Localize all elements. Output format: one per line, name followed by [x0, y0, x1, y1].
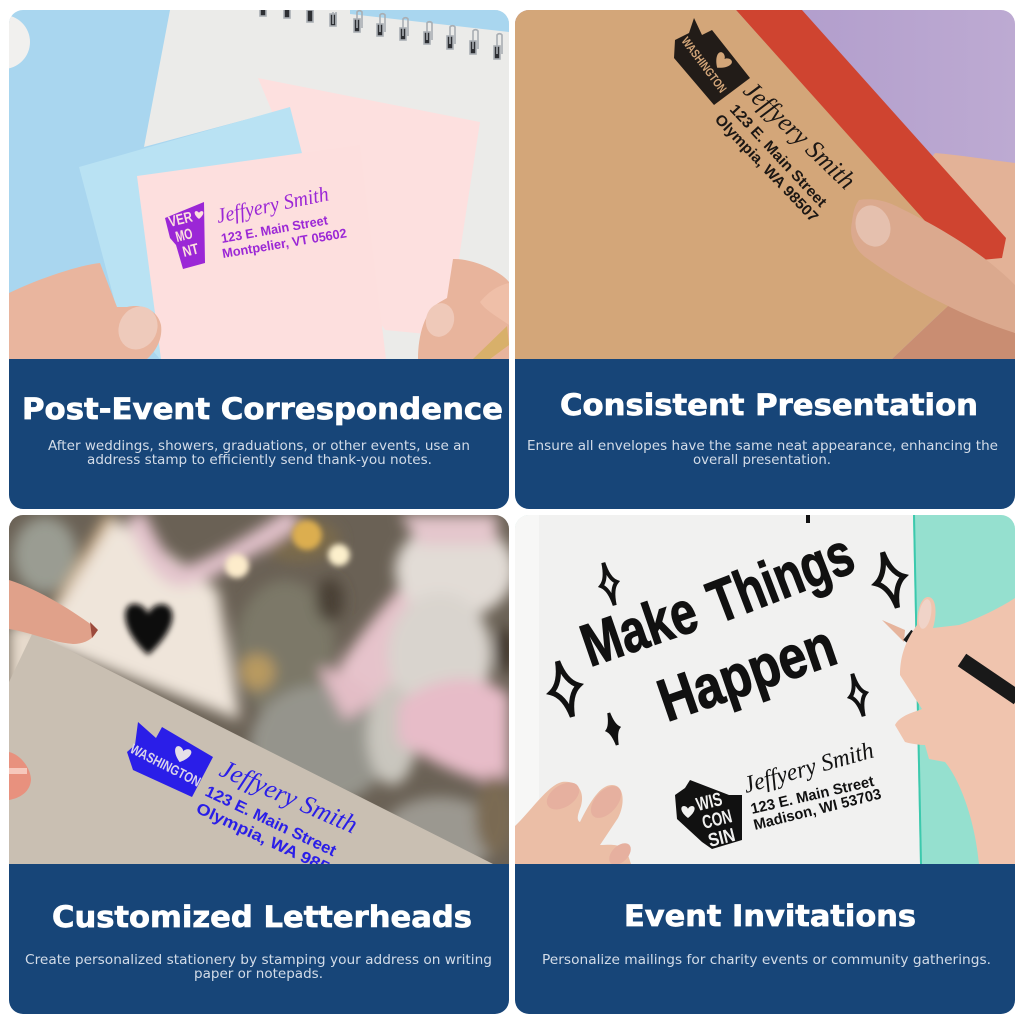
- description: After weddings, showers, graduations, or other events, use an: [48, 438, 470, 454]
- text: stamped name and address: [197, 762, 356, 864]
- heading: Consistent Presentation: [560, 388, 978, 422]
- text: stamped name and address: [716, 84, 854, 220]
- stamp: Washington address in black: [674, 18, 861, 226]
- lettering: Make Things Happen: Make: [572, 578, 706, 679]
- icon: Washington state silhouette: [127, 722, 213, 797]
- photo: sticky notes held in hands: [0, 8, 509, 360]
- description: [26, 954, 491, 981]
- caption background: [515, 359, 1015, 509]
- photo: blurred festive background with grey paper: [9, 515, 515, 873]
- panel: consistent presentation: [515, 10, 1015, 509]
- heading: Event Invitations: [624, 899, 916, 933]
- caption background: [515, 864, 1015, 1014]
- lettering: Make Things Happen: Things: [699, 520, 863, 636]
- heading: Post-Event Correspondence: [22, 392, 503, 426]
- description: address stamp to efficiently send thank-you notes.: [87, 452, 432, 468]
- panel: customized letterheads: [9, 515, 515, 1014]
- icon: Vermont state silhouette: VER: [167, 209, 194, 231]
- panel: post-event correspondence: [0, 8, 509, 509]
- icon: Vermont state silhouette: MO: [174, 225, 195, 246]
- text: stamped name and address: 123 E. Main Street: [749, 773, 876, 818]
- icon: Wisconsin state silhouette: WIS: [694, 789, 724, 816]
- icon: Washington state silhouette: WASHINGTON: [128, 740, 204, 790]
- text: stamped name and address: Jeffyery Smith: [738, 75, 861, 195]
- left hand: [515, 782, 631, 864]
- icon: Washington state silhouette: WASHINGTON: [679, 34, 730, 96]
- text: stamped name and address: Olympia, WA 98507: [193, 800, 350, 885]
- text: stamped name and address: [746, 742, 881, 830]
- description: paper or notepads.: [194, 966, 323, 982]
- icon: Wisconsin state silhouette: CON: [700, 806, 734, 834]
- text: stamped name and address: Montpelier, VT 05602: [221, 225, 348, 261]
- description: [48, 440, 469, 467]
- photo: hand lettered card on teal surface: [515, 515, 1018, 869]
- text: stamped name and address: [218, 186, 347, 258]
- icon: Wisconsin state silhouette: SIN: [706, 825, 737, 852]
- icon: Wisconsin state silhouette: [675, 780, 742, 852]
- text: stamped name and address: 123 E. Main Street: [202, 783, 339, 860]
- lettering: Make Things Happen: Happen: [649, 611, 844, 734]
- text: stamped name and address: Madison, WI 53703: [752, 786, 883, 834]
- text: stamped name and address: 123 E. Main Street: [726, 101, 830, 211]
- text: stamped name and address: Jeffyery Smith: [214, 181, 331, 228]
- icon: Vermont state silhouette: [165, 202, 205, 269]
- description: overall presentation.: [693, 452, 831, 468]
- stamp: Washington address in blue: [127, 722, 356, 864]
- description: [528, 440, 998, 467]
- caption background: [9, 864, 509, 1014]
- icon: Washington state silhouette: [674, 18, 750, 105]
- photo: kraft envelope with red edge held by hand: [515, 10, 1015, 360]
- description: Ensure all envelopes have the same neat appearance, enhancing the: [527, 438, 998, 454]
- description: Personalize mailings for charity events or community gatherings.: [542, 952, 991, 968]
- text: stamped name and address: 123 E. Main Street: [220, 212, 330, 246]
- icon: Vermont state silhouette: NT: [181, 241, 200, 261]
- caption background: [9, 359, 509, 509]
- text: stamped name and address: Jeffyery Smith: [216, 754, 362, 839]
- description: Create personalized stationery by stamping your address on writing: [25, 952, 492, 968]
- stamp: Wisconsin address in black: [675, 738, 883, 852]
- text: stamped name and address: Jeffyery Smith: [741, 738, 877, 799]
- right hand with pen: [882, 597, 1018, 864]
- lettering: Make Things Happen: [578, 543, 854, 722]
- icons: sparkles: [544, 549, 911, 746]
- panel: event invitations: [515, 515, 1018, 1014]
- stamp: Vermont address in purple: [165, 181, 348, 269]
- text: stamped name and address: Olympia, WA 98507: [711, 111, 821, 226]
- heading: Customized Letterheads: [52, 900, 472, 934]
